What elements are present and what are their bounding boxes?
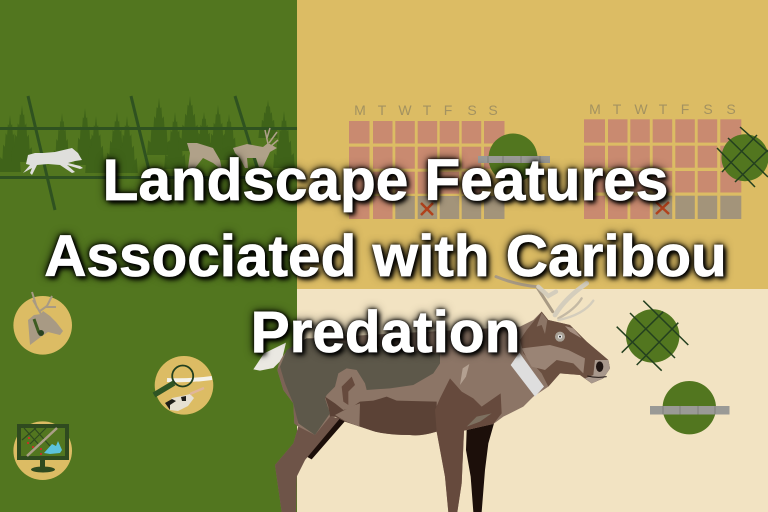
weekday labels: F bbox=[444, 102, 452, 118]
eye bbox=[555, 332, 565, 342]
icon: magnifier over carcass bbox=[154, 356, 213, 415]
saddle bbox=[280, 338, 440, 435]
day cells bbox=[584, 119, 741, 219]
weekday labels: T bbox=[659, 101, 668, 117]
weekday labels: T bbox=[378, 102, 387, 118]
elbow highlight bbox=[467, 413, 492, 427]
weekday labels bbox=[589, 101, 736, 117]
muzzle bbox=[585, 360, 610, 383]
icon: computer monitor with map bbox=[13, 421, 72, 480]
ear bbox=[537, 313, 547, 334]
panel: cream background bbox=[297, 289, 768, 512]
weekday labels: F bbox=[681, 101, 689, 117]
icon: hatched forest patch on calendar bbox=[717, 127, 768, 187]
caribou bbox=[253, 277, 610, 512]
resting caribou bbox=[187, 143, 222, 170]
front leg and shoulder bbox=[435, 378, 502, 512]
title: Landscape Features bbox=[103, 148, 668, 213]
standing caribou with antlers bbox=[233, 128, 278, 168]
calendar: right bbox=[584, 101, 741, 219]
weekday labels: M bbox=[589, 101, 601, 117]
panel: yellow background bbox=[297, 0, 768, 289]
far legs bbox=[307, 417, 494, 512]
belly and hip shading bbox=[325, 397, 437, 435]
lighter flank bbox=[335, 403, 360, 427]
brow highlight bbox=[565, 326, 582, 338]
weekday labels: T bbox=[423, 102, 432, 118]
icon: forest patch with road on calendar bbox=[478, 134, 550, 182]
head bbox=[520, 312, 610, 387]
weekday labels: T bbox=[613, 101, 622, 117]
rump edge bbox=[277, 363, 298, 427]
calendar: left bbox=[349, 102, 504, 219]
inactive cells bbox=[395, 196, 504, 219]
icon: hatched forest patch bbox=[617, 301, 688, 371]
trees bbox=[0, 96, 295, 173]
title: Predation bbox=[251, 300, 520, 365]
x mark bbox=[421, 203, 433, 215]
panel: green background bbox=[0, 0, 297, 512]
hip mark bbox=[342, 377, 355, 405]
hind leg bbox=[275, 417, 340, 512]
face lighter patch bbox=[522, 345, 585, 373]
neck collar bbox=[511, 353, 544, 397]
title: Associated with Caribou bbox=[44, 224, 727, 289]
inactive cells bbox=[653, 196, 741, 219]
weekday labels: M bbox=[354, 102, 366, 118]
weekday labels: W bbox=[398, 102, 412, 118]
antlers bbox=[496, 277, 593, 320]
roads bbox=[0, 96, 297, 210]
icon: caribou collar bbox=[13, 292, 72, 355]
body bbox=[275, 312, 610, 512]
shoulder highlight bbox=[460, 364, 469, 385]
weekday labels: S bbox=[467, 102, 477, 118]
weekday labels: S bbox=[488, 102, 498, 118]
wolf bbox=[23, 148, 83, 175]
tail bbox=[253, 343, 286, 371]
weekday labels: S bbox=[726, 101, 736, 117]
forest scene with roads bbox=[0, 96, 297, 210]
x mark bbox=[656, 202, 669, 214]
weekday labels: W bbox=[634, 101, 648, 117]
weekday labels: S bbox=[703, 101, 713, 117]
weekday labels bbox=[354, 102, 498, 118]
icon: forest patch with road bbox=[650, 381, 730, 434]
day cells bbox=[349, 121, 504, 219]
